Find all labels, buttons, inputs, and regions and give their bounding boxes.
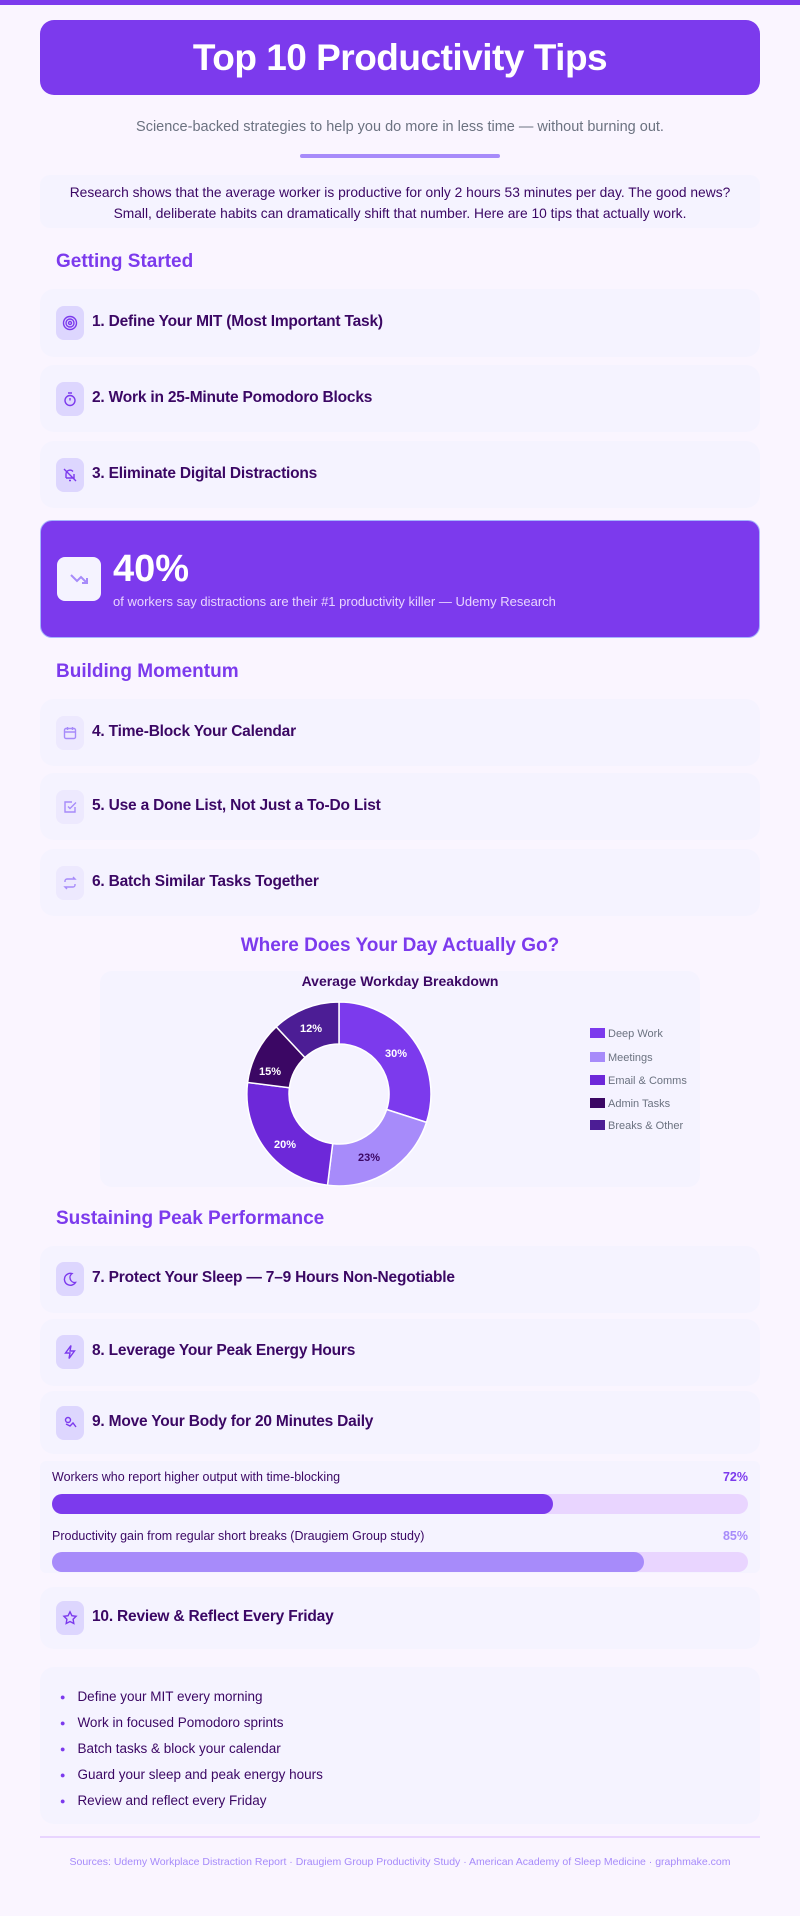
subtitle: Science-backed strategies to help you do more in less time — without burning out. (136, 119, 664, 135)
progress bars panel (40, 1461, 760, 1573)
bar 2: 85% (723, 1529, 748, 1543)
icon: activity (56, 1406, 84, 1440)
legend: Deep Work (608, 1028, 663, 1040)
card: tip 5 (40, 773, 760, 840)
legend: Breaks & Other (608, 1120, 684, 1132)
icon: lightning (56, 1335, 84, 1369)
card: tip 4 (40, 699, 760, 766)
intro text block: Small, deliberate habits can dramatically shift that number. Here are 10 tips that actually work. (114, 206, 686, 221)
card: tip 9 (40, 1391, 760, 1454)
bar 1: Workers who report higher output with time-blocking (52, 1470, 340, 1484)
stat callout: 40% (40, 520, 760, 638)
summary checklist: ● Guard your sleep and peak energy hours (60, 1767, 323, 1782)
card: tip 8 (40, 1319, 760, 1386)
icon: repeat (56, 866, 84, 900)
legend: Admin Tasks (608, 1098, 671, 1110)
donut chart: 15% (259, 1066, 281, 1078)
heading: chart section: Where Does Your Day Actually Go? (241, 935, 559, 956)
bar 1: 72% (723, 1470, 748, 1484)
donut chart panel (100, 971, 700, 1187)
intro text block (40, 175, 760, 228)
card: tip 6: 6. Batch Similar Tasks Together (92, 873, 319, 890)
top bar (0, 0, 800, 5)
card: tip 4: 4. Time-Block Your Calendar (92, 723, 296, 740)
card: tip 2 (40, 365, 760, 432)
footer sources: Sources: Udemy Workplace Distraction Report · Draugiem Group Productivity Study · American Academy of Sleep Medicine · graphmake.com (70, 1856, 730, 1868)
card: tip 3 (40, 441, 760, 508)
donut chart: 30% (385, 1048, 407, 1060)
summary checklist: ● Define your MIT every morning (60, 1689, 263, 1704)
summary checklist (40, 1667, 760, 1824)
intro text block: Research shows that the average worker is productive for only 2 hours 53 minutes per day. The good news? (70, 185, 730, 200)
icon: moon (56, 1262, 84, 1296)
bar 2 (52, 1529, 748, 1572)
card: tip 10 (40, 1587, 760, 1649)
card: tip 3: 3. Eliminate Digital Distractions (92, 465, 317, 482)
card: tip 7: 7. Protect Your Sleep — 7–9 Hours Non-Negotiable (92, 1269, 455, 1286)
donut chart (246, 1001, 687, 1186)
donut chart panel: Average Workday Breakdown (302, 973, 498, 989)
card: tip 7 (40, 1246, 760, 1313)
icon: timer (56, 382, 84, 416)
icon: check square (56, 790, 84, 824)
donut chart: 20% (274, 1139, 296, 1151)
icon: trending down (57, 557, 101, 601)
card: tip 2: 2. Work in 25-Minute Pomodoro Blocks (92, 389, 372, 406)
title banner: Top 10 Productivity Tips (193, 37, 607, 78)
summary checklist: ● Work in focused Pomodoro sprints (60, 1715, 284, 1730)
donut chart: 12% (300, 1023, 322, 1035)
summary checklist: ● Batch tasks & block your calendar (60, 1741, 281, 1756)
summary checklist: ● Review and reflect every Friday (60, 1793, 267, 1808)
footer line (40, 1836, 760, 1838)
title banner (40, 20, 760, 95)
card: tip 5: 5. Use a Done List, Not Just a To-Do List (92, 797, 381, 814)
bar 2: Productivity gain from regular short breaks (Draugiem Group study) (52, 1529, 424, 1543)
heading: Building Momentum: Building Momentum (56, 661, 239, 682)
stat callout: 40%: of workers say distractions are their #1 productivity killer — Udemy Research (113, 594, 556, 609)
card: tip 10: 10. Review & Reflect Every Friday (92, 1608, 334, 1625)
icon: star (56, 1601, 84, 1635)
legend: Email & Comms (608, 1075, 687, 1087)
bar 1 (52, 1470, 748, 1514)
card: tip 9: 9. Move Your Body for 20 Minutes Daily (92, 1413, 373, 1430)
card: tip 6 (40, 849, 760, 916)
donut chart: 23% (358, 1152, 380, 1164)
heading: Sustaining Peak Performance: Sustaining Peak Performance (56, 1208, 324, 1229)
icon: calendar (56, 716, 84, 750)
icon: target (56, 306, 84, 340)
divider (300, 154, 500, 158)
card: tip 1 (40, 289, 760, 357)
card: tip 8: 8. Leverage Your Peak Energy Hours (92, 1342, 355, 1359)
stat callout: 40%: 40% (113, 548, 189, 590)
heading: Getting Started: Getting Started (56, 251, 193, 272)
legend: Meetings (608, 1052, 653, 1064)
card: tip 1: 1. Define Your MIT (Most Important Task) (92, 313, 383, 330)
icon: bell off (56, 458, 84, 492)
legend (590, 1028, 687, 1132)
